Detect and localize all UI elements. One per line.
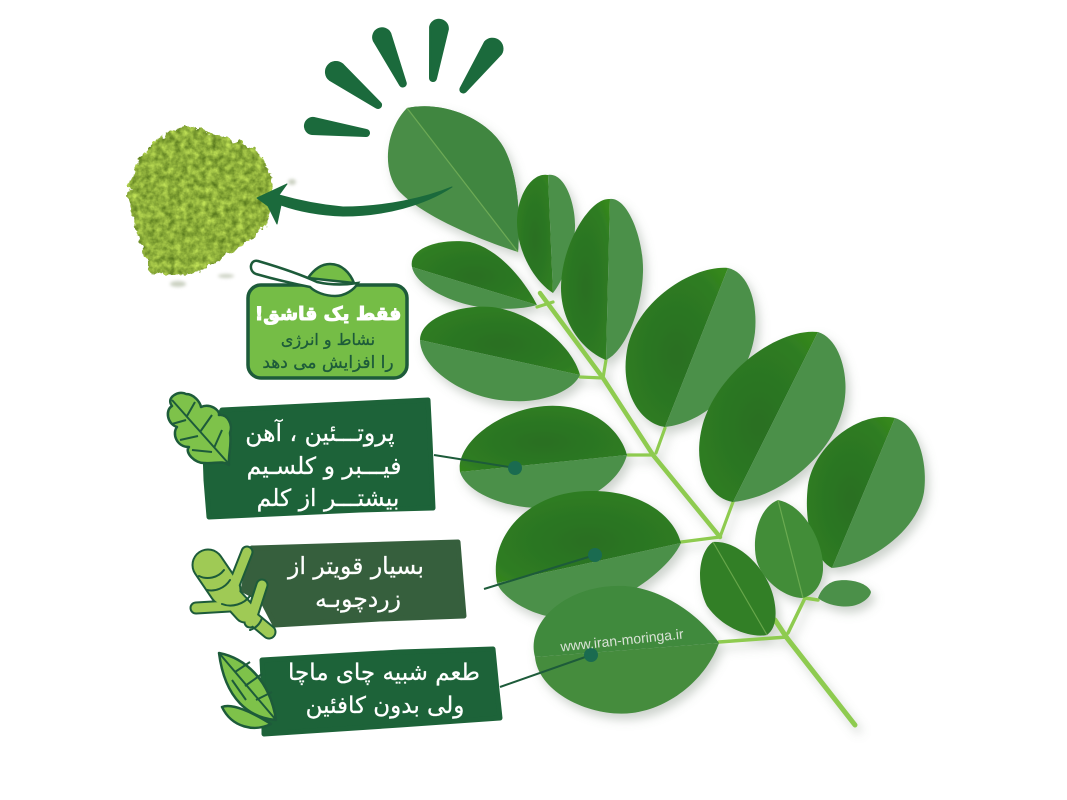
leaf 2	[412, 241, 537, 309]
text: protein: پروتـــئین ، آهن	[245, 418, 395, 447]
icon: tea leaves	[219, 653, 276, 728]
text: turmeric: بسیار قویتر از	[287, 552, 424, 580]
icon: lobed leaf	[168, 393, 231, 465]
text: turmeric: زردچوبـه	[315, 585, 401, 613]
text: protein: بیشتـــر از کلم	[257, 484, 399, 512]
powder pile	[128, 127, 296, 287]
leaf 6	[626, 268, 755, 427]
text: taste: طعم شبیه چای ماچا	[288, 660, 480, 686]
text: protein: فیـــبر و کلسـیم	[247, 452, 401, 480]
leaf 4	[561, 199, 643, 360]
spoon headline: فقط یک قاشق!	[255, 304, 401, 325]
leaf 12	[700, 542, 776, 636]
panel: protein	[205, 400, 433, 517]
spoon text: نشاط و انرژی	[281, 330, 375, 350]
leaf 7	[699, 332, 846, 502]
text: taste: ولی بدون کافئین	[306, 693, 464, 719]
text: taste	[288, 660, 480, 719]
text: protein	[245, 418, 401, 512]
panel: turmeric	[243, 542, 464, 625]
leaf 3	[517, 175, 575, 293]
moringa branch	[388, 106, 925, 725]
leaf 10	[496, 491, 681, 617]
watermark: www.iran-moringa.ir	[559, 626, 685, 655]
icon: ginger root	[196, 552, 269, 632]
arrow to powder	[257, 184, 452, 224]
leaf 13	[755, 500, 823, 598]
spoon text line 2: را افزایش می دهد	[262, 353, 394, 373]
leaf 5	[420, 307, 580, 401]
text: turmeric	[287, 552, 424, 613]
panel: one spoon	[248, 261, 407, 378]
stems	[537, 293, 855, 725]
leaf 9	[460, 406, 627, 508]
icon: spoon	[251, 261, 358, 296]
leaf 8	[807, 417, 925, 568]
leaf 14 small	[818, 580, 871, 607]
leaf 11	[534, 586, 719, 714]
callout lines	[434, 455, 602, 687]
rays above the leaf	[305, 20, 502, 136]
leaf 1 top	[388, 106, 519, 252]
panel: taste	[262, 649, 500, 734]
